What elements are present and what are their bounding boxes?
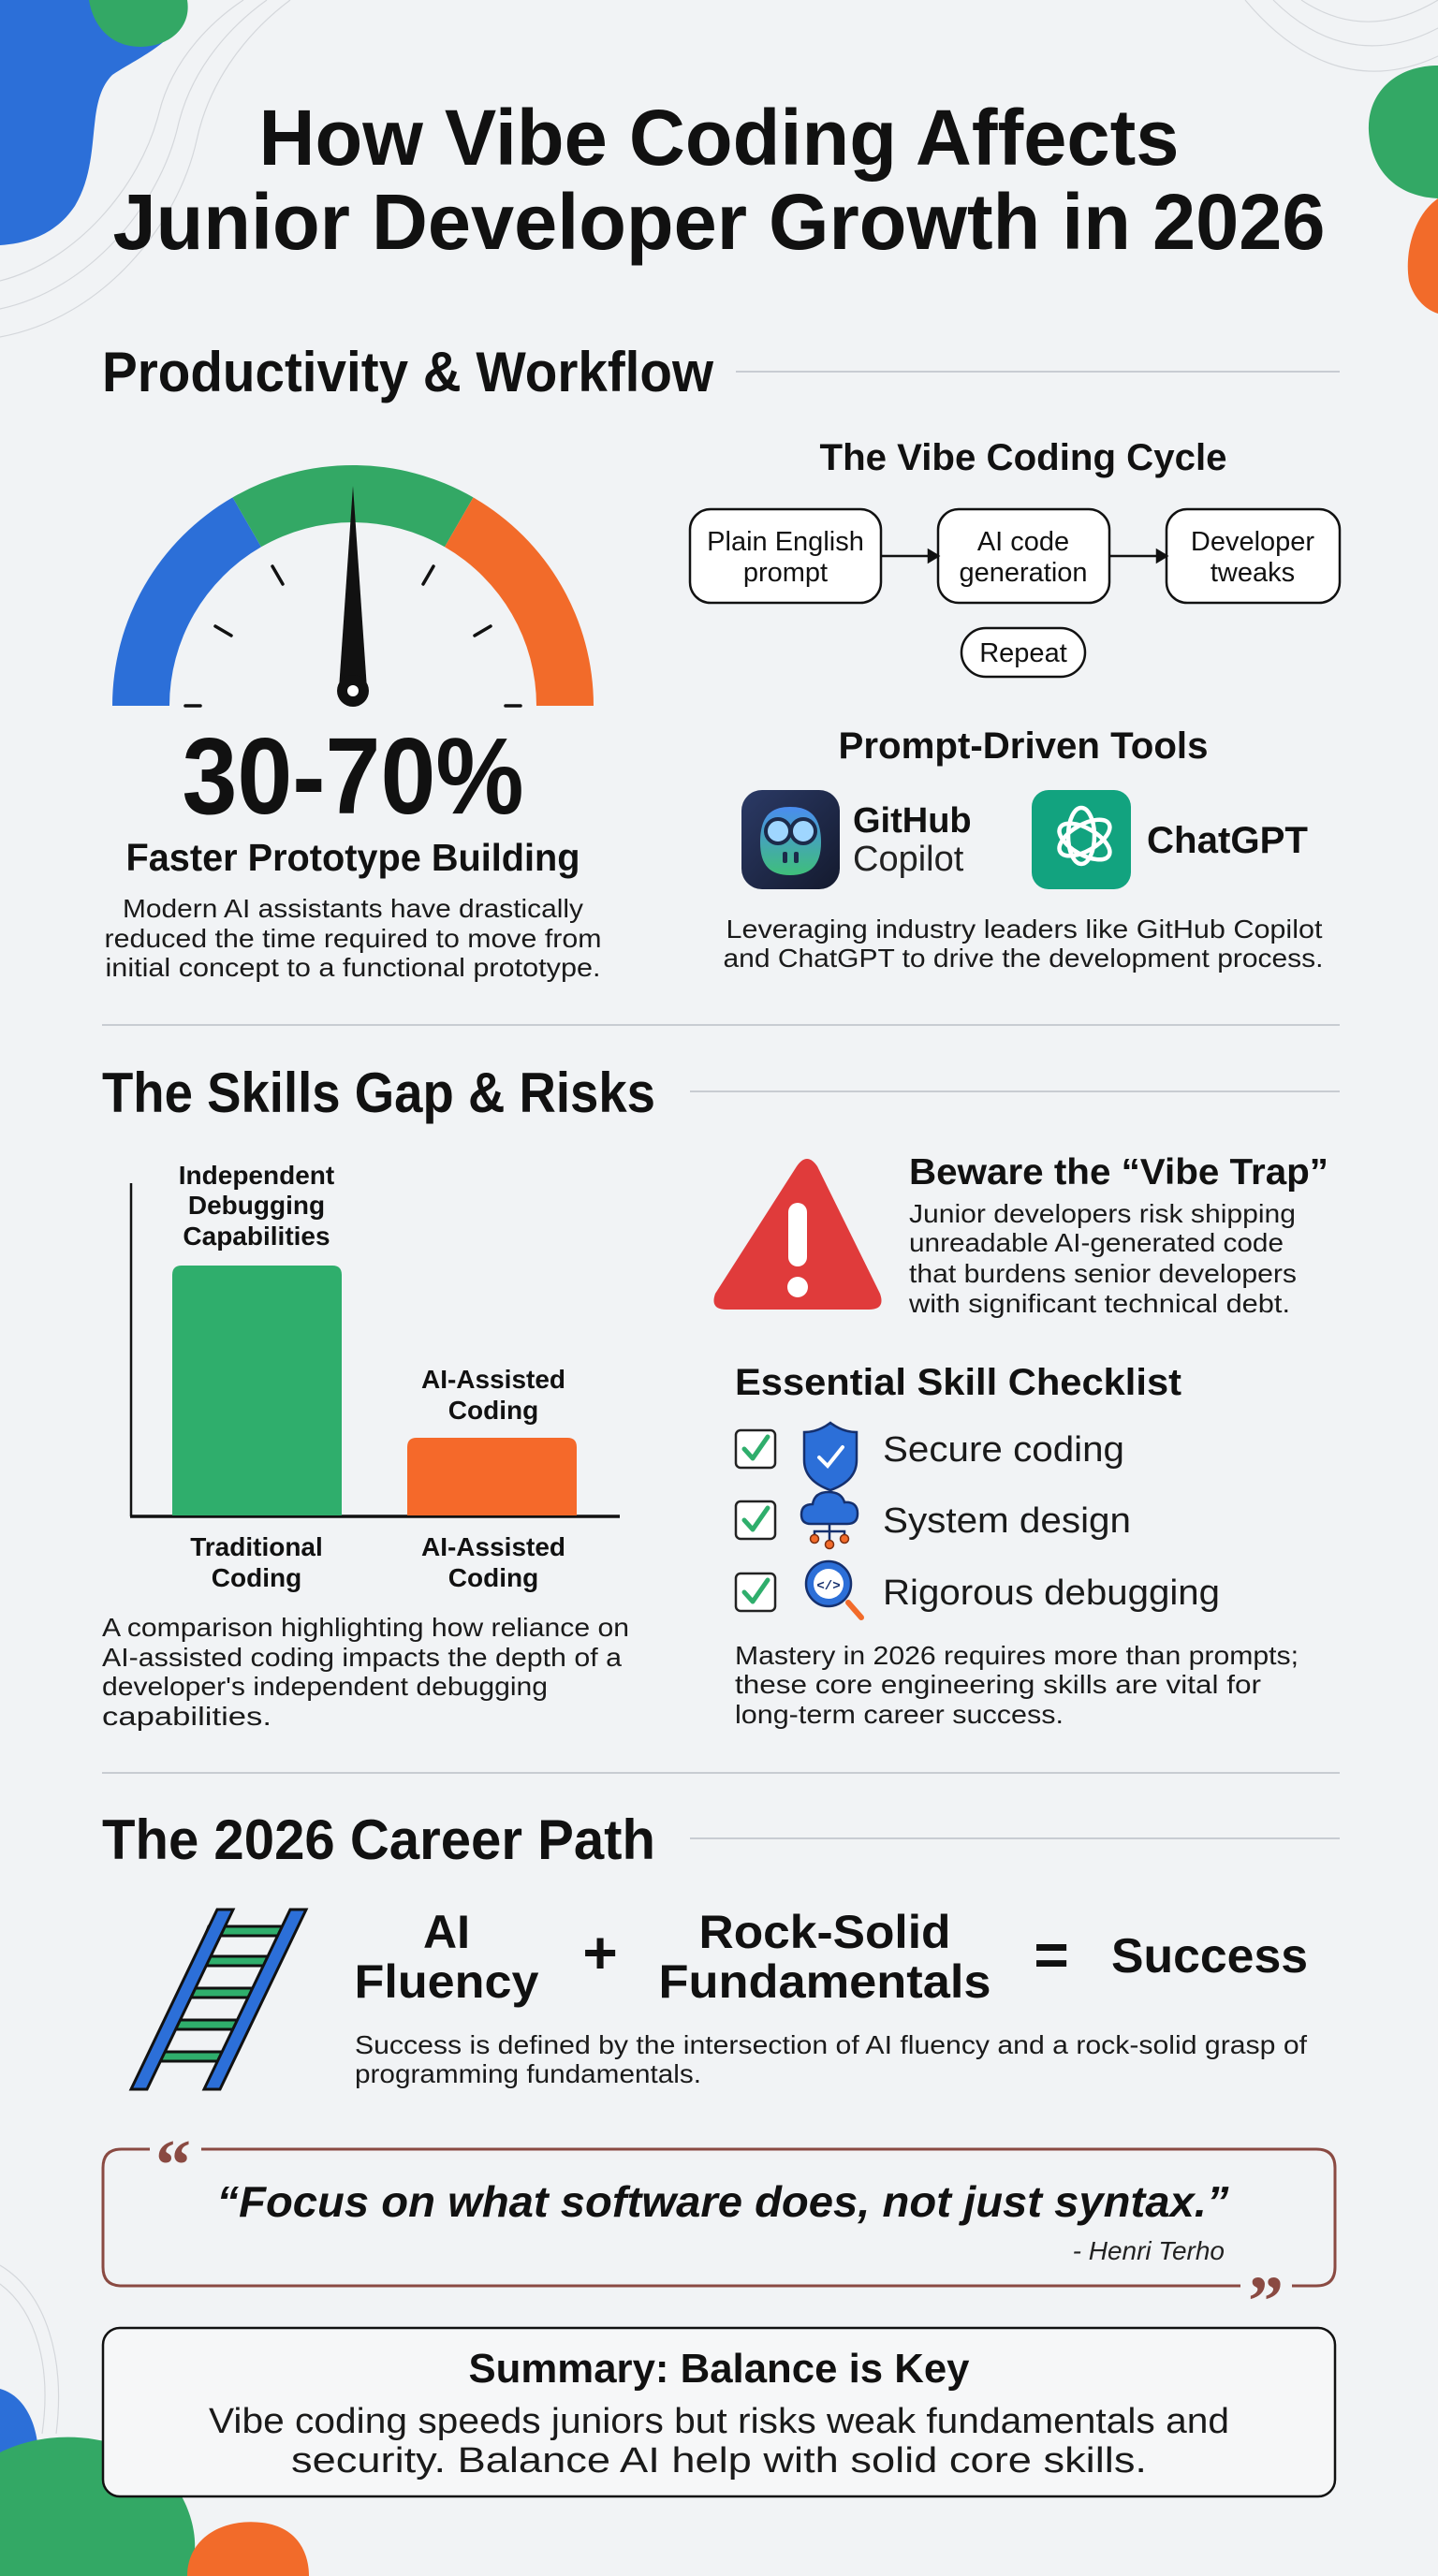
equation: AI Fluency + Rock-Solid Fundamentals = Success: Fluency: [354, 1955, 539, 2008]
quote box: ”: [1248, 2262, 1284, 2341]
career description: Success is defined by the intersection of AI fluency and a rock-solid grasp of: [355, 2030, 1307, 2059]
summary box: Vibe coding speeds juniors but risks weak fundamentals and: [209, 2402, 1229, 2441]
bar chart: Coding: [448, 1563, 538, 1592]
panel: prompt-driven tools: Copilot: [853, 840, 964, 879]
decoration: bottom-left blobs: [0, 2389, 309, 2576]
panel: vibe coding cycle: Developer: [1191, 527, 1314, 557]
panel: vibe coding cycle: Plain English: [707, 527, 864, 557]
heading: Productivity & Workflow: Productivity & Workflow: [102, 341, 713, 403]
panel: vibe coding cycle: [690, 437, 1340, 677]
icon: magnifier debugging: </>: [816, 1579, 841, 1594]
bar chart: [102, 1161, 629, 1731]
icon: GitHub Copilot: [741, 790, 840, 889]
icon: ladder: [131, 1910, 306, 2089]
summary box: security. Balance AI help with solid core skills.: [291, 2441, 1147, 2481]
panel: essential skill checklist: Essential Skill Checklist: [735, 1362, 1181, 1403]
summary box: Summary: Balance is Key: [468, 2346, 970, 2392]
equation: AI Fluency + Rock-Solid Fundamentals = Success: AI: [423, 1906, 470, 1958]
title: How Vibe Coding Affects: [258, 94, 1180, 182]
career description: programming fundamentals.: [355, 2059, 701, 2088]
callout: vibe trap: [713, 1152, 1328, 1318]
quote box: - Henri Terho: [1073, 2236, 1225, 2265]
gauge chart: [112, 465, 594, 707]
icon: shield: [804, 1423, 857, 1490]
panel: essential skill checklist: these core engineering skills are vital for: [735, 1670, 1261, 1699]
icon: cloud network: [801, 1492, 858, 1548]
stat description: [105, 894, 601, 982]
panel: prompt-driven tools: [723, 725, 1324, 973]
callout: vibe trap: that burdens senior developers: [909, 1259, 1297, 1288]
callout: vibe trap: unreadable AI-generated code: [909, 1228, 1284, 1257]
bar chart: Independent: [179, 1161, 334, 1190]
panel: essential skill checklist: System design: [883, 1501, 1131, 1541]
heading: The Skills Gap & Risks: The Skills Gap & Risks: [102, 1061, 655, 1124]
panel: vibe coding cycle: Repeat: [979, 638, 1067, 668]
panel: essential skill checklist: [735, 1362, 1299, 1729]
bar chart: AI-Assisted: [421, 1365, 565, 1394]
callout: vibe trap: Beware the “Vibe Trap”: [909, 1152, 1328, 1193]
chart description: capabilities.: [102, 1702, 271, 1731]
panel: vibe coding cycle: AI code: [977, 527, 1069, 557]
panel: prompt-driven tools: Leveraging industry leaders like GitHub Copilot: [726, 915, 1323, 944]
equation: AI Fluency + Rock-Solid Fundamentals = Success: =: [1034, 1921, 1069, 1988]
panel: essential skill checklist: Mastery in 2026 requires more than prompts;: [735, 1641, 1299, 1670]
title: Junior Developer Growth in 2026: [112, 178, 1326, 266]
quote box: [103, 2126, 1335, 2341]
panel: prompt-driven tools: Prompt-Driven Tools: [839, 725, 1208, 767]
bar chart: Coding: [212, 1563, 301, 1592]
summary box: [103, 2328, 1335, 2496]
panel: prompt-driven tools: ChatGPT: [1147, 820, 1308, 861]
stat: 30-70%: [105, 715, 601, 982]
panel: vibe coding cycle: The Vibe Coding Cycle: [820, 437, 1226, 478]
stat: 30-70%: 30-70%: [182, 715, 524, 837]
needle: [337, 486, 369, 707]
chart description: developer's independent debugging: [102, 1672, 548, 1701]
equation: AI Fluency + Rock-Solid Fundamentals = Success: [354, 1906, 1308, 2008]
panel: prompt-driven tools: GitHub: [853, 801, 972, 841]
career description: [355, 2030, 1307, 2088]
heading: The 2026 Career Path: The 2026 Career Path: [102, 1808, 655, 1871]
quote box: “: [155, 2126, 191, 2204]
icon: magnifier debugging: [806, 1561, 861, 1617]
quote box: “Focus on what software does, not just syntax.”: [217, 2177, 1228, 2226]
panel: essential skill checklist: long-term career success.: [735, 1700, 1064, 1729]
bar chart: AI-Assisted: [421, 1532, 565, 1561]
bar chart: Debugging: [188, 1191, 325, 1220]
equation: AI Fluency + Rock-Solid Fundamentals = Success: Rock-Solid: [698, 1906, 951, 1958]
bar chart: Coding: [448, 1396, 538, 1425]
panel: vibe coding cycle: generation: [959, 558, 1088, 588]
equation: AI Fluency + Rock-Solid Fundamentals = Success: Fundamentals: [659, 1955, 990, 2008]
chart description: A comparison highlighting how reliance on: [102, 1613, 629, 1642]
icon: ChatGPT: [1032, 790, 1131, 889]
stat: 30-70%: Faster Prototype Building: [125, 836, 580, 879]
bar chart: Capabilities: [183, 1222, 330, 1251]
panel: essential skill checklist: Secure coding: [883, 1430, 1124, 1470]
icon: warning triangle: [713, 1159, 882, 1310]
stat description: reduced the time required to move from: [105, 924, 601, 953]
bar chart: Traditional: [190, 1532, 323, 1561]
panel: essential skill checklist: Rigorous debugging: [883, 1573, 1220, 1613]
decoration: top-right blobs: [1369, 66, 1438, 314]
stat description: Modern AI assistants have drastically: [123, 894, 583, 923]
stat description: initial concept to a functional prototype.: [105, 953, 601, 982]
panel: vibe coding cycle: prompt: [743, 558, 828, 588]
title: [112, 94, 1326, 266]
panel: prompt-driven tools: and ChatGPT to drive the development process.: [723, 944, 1324, 973]
chart description: AI-assisted coding impacts the depth of a: [102, 1643, 622, 1672]
callout: vibe trap: Junior developers risk shipping: [909, 1199, 1296, 1228]
chart description: [102, 1613, 629, 1731]
callout: vibe trap: with significant technical debt.: [908, 1289, 1290, 1318]
equation: AI Fluency + Rock-Solid Fundamentals = Success: +: [582, 1919, 618, 1986]
decoration: top-left blobs: [0, 0, 188, 245]
panel: vibe coding cycle: tweaks: [1211, 558, 1295, 588]
equation: AI Fluency + Rock-Solid Fundamentals = Success: Success: [1111, 1929, 1308, 1983]
